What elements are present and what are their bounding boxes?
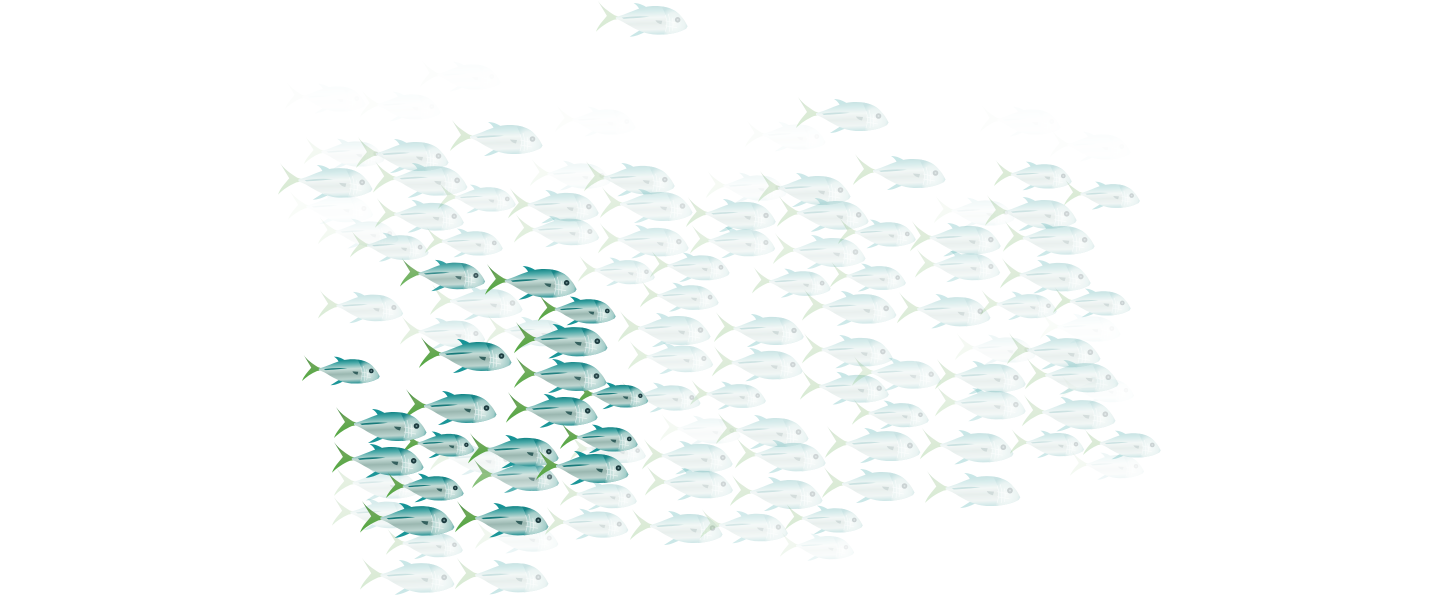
pale fish <box>1007 333 1100 369</box>
pale fish <box>773 233 866 269</box>
pale fish <box>752 267 831 298</box>
pale fish <box>796 97 888 133</box>
pale fish <box>915 249 1000 282</box>
pale fish <box>430 284 522 320</box>
pale fish <box>640 281 719 312</box>
pale fish <box>1022 395 1115 431</box>
pale fish <box>560 480 637 510</box>
pale fish <box>618 311 710 347</box>
pale fish <box>450 120 542 156</box>
pale fish <box>318 290 403 323</box>
pale fish <box>910 221 1001 256</box>
pale fish <box>825 426 920 463</box>
pale fish <box>598 223 689 258</box>
pale fish <box>545 507 628 539</box>
pale fish <box>716 413 808 449</box>
pale fish <box>700 509 788 543</box>
pale fish <box>730 475 822 511</box>
pale fish <box>1010 429 1084 458</box>
pale fish <box>596 1 688 37</box>
pale fish <box>735 438 826 473</box>
pale fish <box>584 161 675 196</box>
pale fish <box>925 471 1020 508</box>
pale fish <box>455 558 548 594</box>
pale fish <box>1053 287 1131 317</box>
pale fish <box>852 356 941 391</box>
pale fish <box>1083 429 1161 459</box>
pale fish <box>642 439 733 474</box>
pale fish <box>1025 358 1118 394</box>
pale fish <box>802 333 893 368</box>
pale fish <box>852 399 929 429</box>
teal fish <box>386 472 464 502</box>
pale fish <box>994 160 1072 190</box>
pale fish <box>830 262 906 292</box>
pale fish <box>373 161 467 198</box>
teal fish <box>404 389 496 425</box>
pale fish <box>386 529 463 559</box>
pale fish <box>375 198 464 233</box>
pale fish <box>838 218 916 248</box>
pale fish <box>1000 258 1091 293</box>
teal fish <box>538 295 616 325</box>
pale fish <box>802 289 896 326</box>
pale fish <box>645 466 733 500</box>
teal fish <box>514 357 606 393</box>
teal fish <box>400 258 485 291</box>
teal fish <box>360 501 454 538</box>
teal fish <box>468 433 559 468</box>
pale fish <box>777 196 869 232</box>
teal fish <box>402 430 474 458</box>
pale fish <box>400 316 485 349</box>
pale fish <box>690 380 766 410</box>
pale fish <box>897 292 990 328</box>
teal fish <box>419 337 512 373</box>
pale fish <box>508 188 599 223</box>
pale fish <box>350 231 429 262</box>
pale fish <box>650 251 730 282</box>
pale fish <box>985 195 1077 231</box>
teal fish <box>560 423 638 453</box>
pale fish <box>822 467 914 503</box>
pale fish <box>600 187 692 223</box>
ghost fish layer <box>285 60 1144 561</box>
teal fish <box>514 322 607 358</box>
teal fish <box>536 449 628 485</box>
pale fish <box>334 467 420 500</box>
pale fish <box>628 341 713 374</box>
pale fish <box>686 197 776 232</box>
teal fish <box>455 501 548 537</box>
pale fish <box>758 171 850 207</box>
pale fish <box>486 315 571 348</box>
teal fish <box>332 442 424 478</box>
pale fish <box>570 435 646 465</box>
pale fish <box>714 312 804 347</box>
pale fish <box>278 163 372 200</box>
pale fish <box>578 256 655 286</box>
teal fish <box>485 264 577 300</box>
pale fish <box>920 428 1013 464</box>
pale fish <box>425 227 503 257</box>
dark fish layer <box>302 258 648 538</box>
pale fish <box>356 137 448 173</box>
teal fish <box>506 392 598 428</box>
pale fish <box>620 381 700 412</box>
teal fish <box>334 407 426 443</box>
pale fish <box>785 504 863 534</box>
pale fish <box>360 558 454 595</box>
pale fish <box>1064 180 1140 210</box>
pale fish <box>980 290 1057 320</box>
pale fish <box>438 183 516 213</box>
pale fish <box>935 359 1026 394</box>
pale fish <box>630 509 722 545</box>
pale fish <box>712 346 803 381</box>
teal fish <box>576 381 648 409</box>
pale fish <box>430 442 515 475</box>
pale fish layer <box>278 1 1161 595</box>
pale fish <box>935 386 1026 421</box>
pale fish <box>853 154 946 190</box>
pale fish <box>1003 221 1095 257</box>
pale fish <box>332 497 417 530</box>
pale fish <box>800 370 889 405</box>
pale fish <box>514 214 599 247</box>
pale fish <box>690 225 775 258</box>
teal fish <box>472 459 559 493</box>
teal fish <box>302 355 380 385</box>
